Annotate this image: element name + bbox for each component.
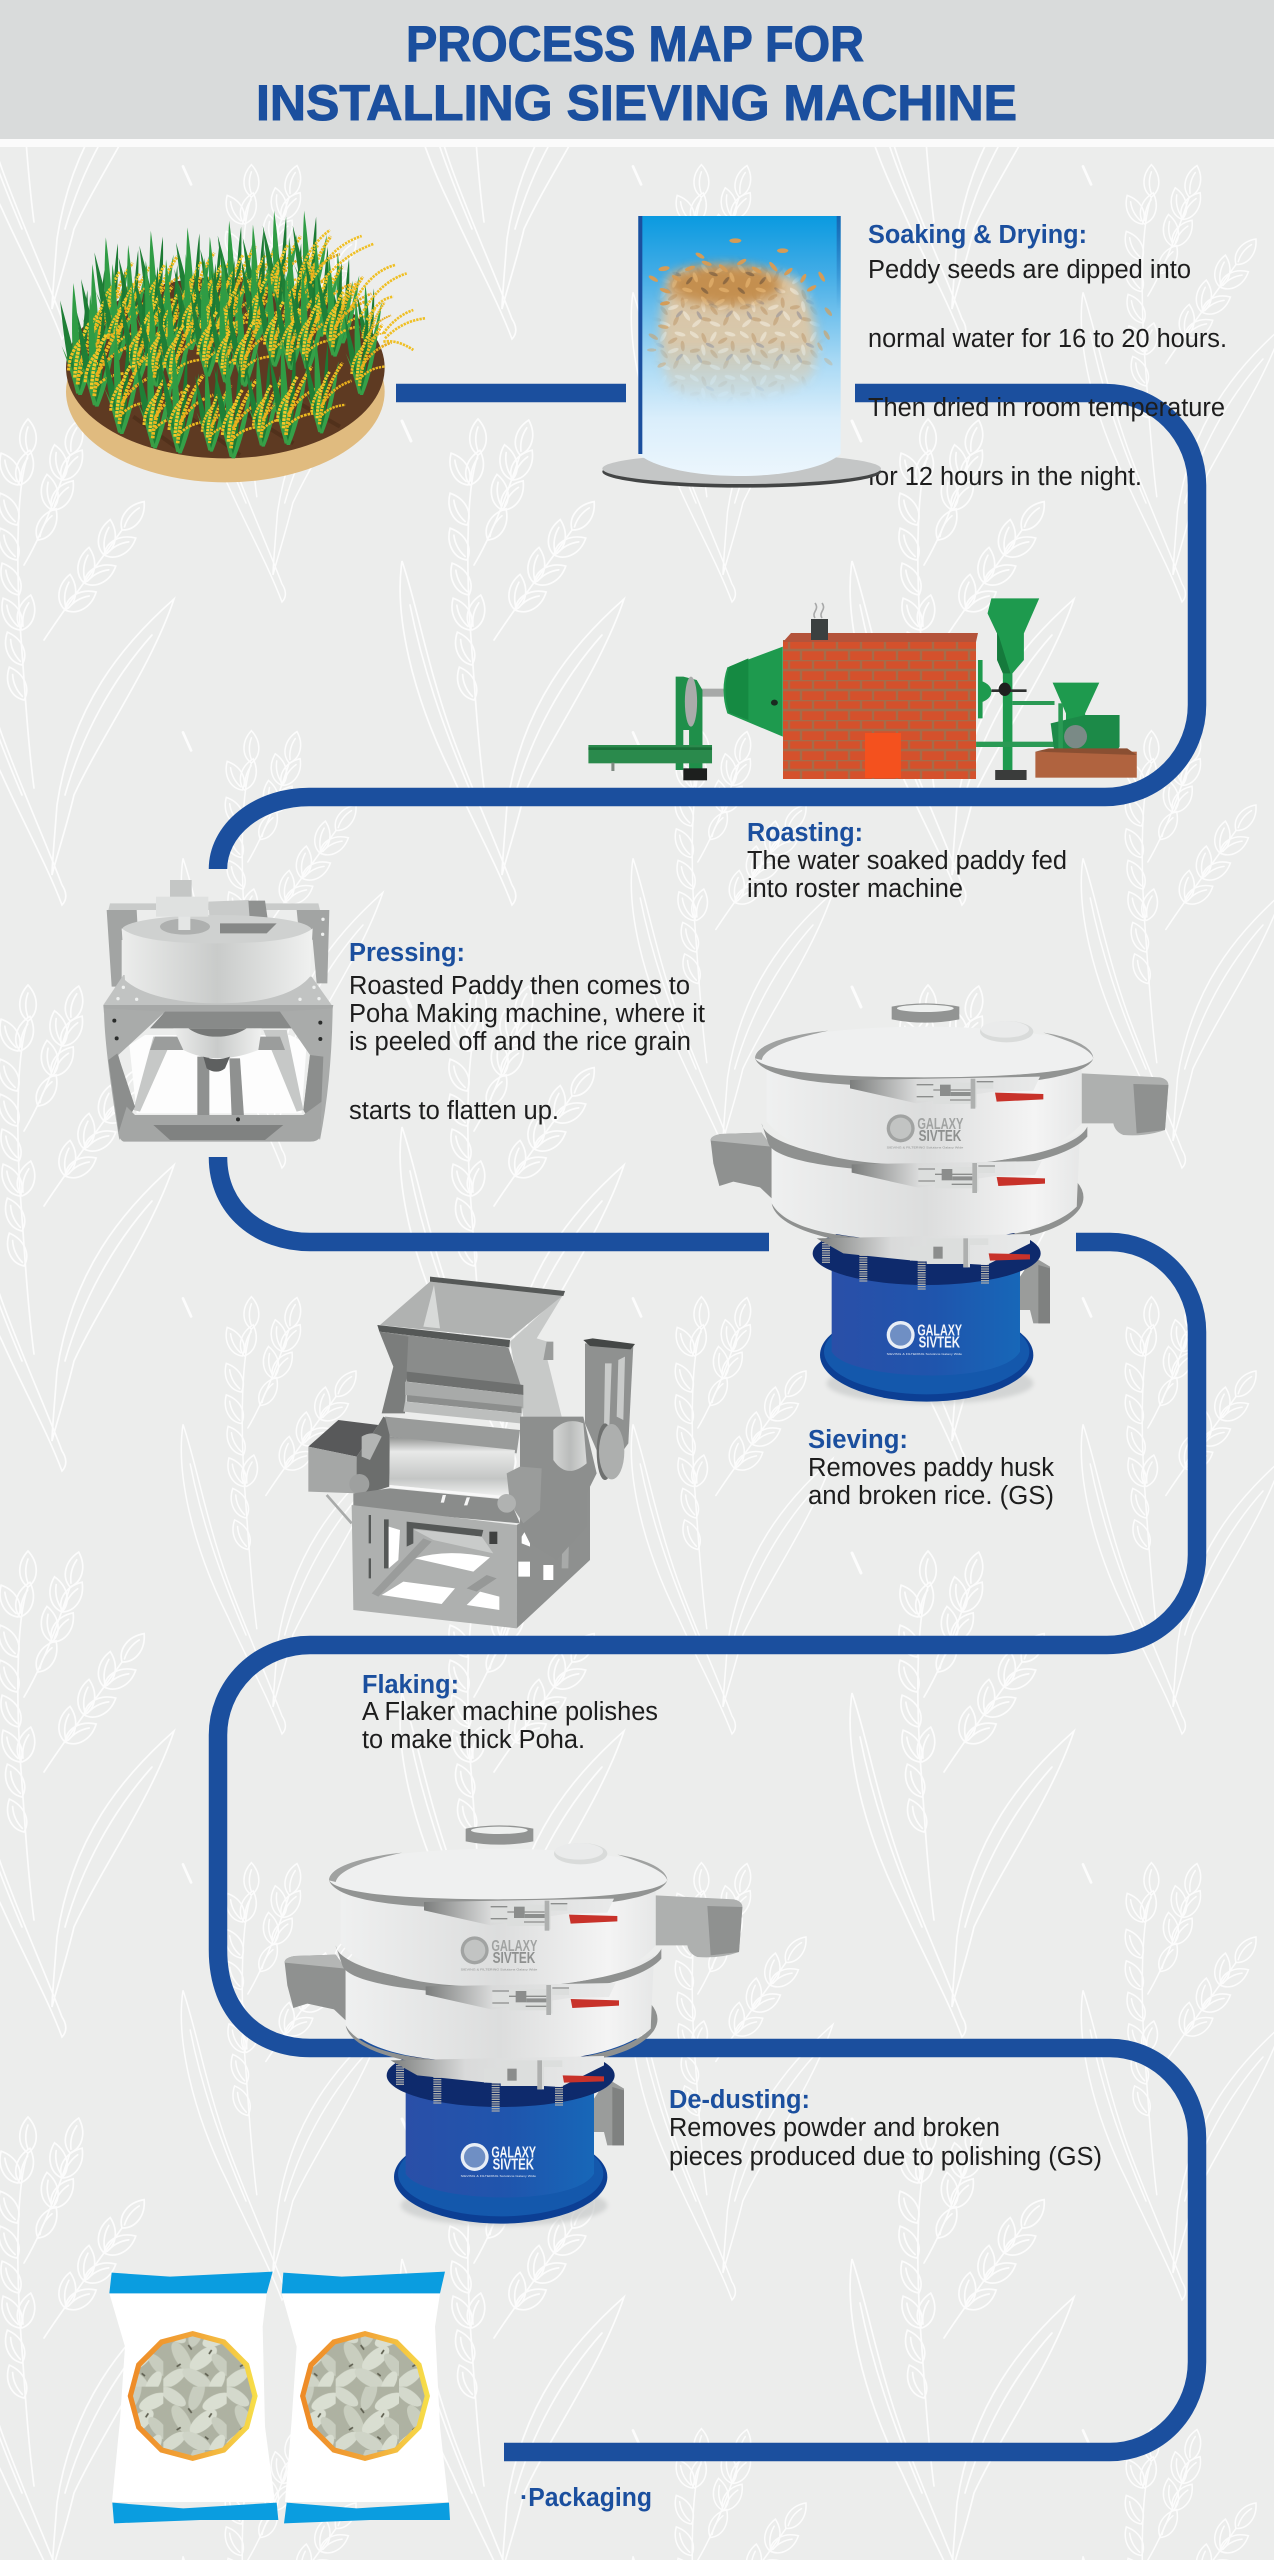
text: sieving: Removes paddy husk: [808, 1454, 1054, 1482]
text: flaking: A Flaker machine polishes: [362, 1698, 658, 1726]
icon: de-dusting sieving machine: [285, 1825, 742, 2226]
text: roasting: into roster machine: [747, 875, 963, 903]
icon: roaster machine: [588, 598, 1137, 780]
text: soaking and drying: normal water for 16 to 20 hours.: [868, 325, 1227, 353]
logo: white base mark: GALAXY: [917, 1323, 962, 1340]
text: roasting: [747, 819, 1067, 903]
logo: white base mark 2: [461, 2143, 536, 2178]
text: de-dusting: Removes powder and broken: [669, 2114, 1000, 2142]
logo: white base mark: SIVTEK: [919, 1334, 960, 1351]
packet 2: [282, 2272, 450, 2523]
logo: grey body mark: [887, 1114, 964, 1149]
logo: grey body mark: GALAXY: [917, 1116, 963, 1133]
logo: grey body mark: SIEVING & FILTERING Solutions Galaxy Wide: [887, 1145, 964, 1149]
text: pressing: is peeled off and the rice grain: [349, 1028, 691, 1056]
title: INSTALLING SIEVING MACHINE: [256, 75, 1017, 131]
icon: rice field: [60, 211, 425, 482]
icon: pressing machine: [103, 880, 333, 1142]
flow path: [218, 393, 1197, 2452]
text: pressing: starts to flatten up.: [349, 1097, 559, 1125]
text: soaking and drying: Then dried in room temperature: [868, 394, 1225, 422]
text: pressing: Poha Making machine, where it: [349, 1000, 705, 1028]
text: sieving: Sieving:: [808, 1426, 908, 1454]
text: de-dusting: pieces produced due to polishing (GS): [669, 2143, 1102, 2171]
text: sieving: and broken rice. (GS): [808, 1482, 1054, 1510]
logo: white base mark 2: SIVTEK: [493, 2156, 534, 2173]
text: soaking and drying: [868, 221, 1227, 491]
text: pressing: Roasted Paddy then comes to: [349, 972, 690, 1000]
text: de-dusting: De-dusting:: [669, 2086, 810, 2114]
logo: white base mark: [887, 1321, 962, 1356]
text: soaking and drying: for 12 hours in the night.: [868, 463, 1142, 491]
packet 1: [109, 2272, 278, 2523]
icon: poha packets: [109, 2272, 450, 2523]
text: de-dusting: [669, 2086, 1102, 2171]
title banner: [0, 0, 1274, 147]
text: roasting: The water soaked paddy fed: [747, 847, 1067, 875]
icon: sieving machine (Galaxy Sivtek): [711, 1003, 1168, 1404]
text: roasting: Roasting:: [747, 819, 863, 847]
logo: grey body mark 2: GALAXY: [491, 1938, 537, 1955]
icon: soaking water cylinder with grains: [602, 216, 881, 488]
logo: white base mark 2: GALAXY: [491, 2145, 536, 2162]
logo: grey body mark 2: SIVTEK: [493, 1950, 535, 1967]
text: soaking and drying: Soaking & Drying:: [868, 221, 1087, 249]
title: [256, 16, 1017, 131]
title: PROCESS MAP FOR: [406, 16, 864, 72]
text: flaking: Flaking:: [362, 1671, 459, 1699]
logo: white base mark: SIEVING & FILTERING Solutions Galaxy Wide: [887, 1352, 962, 1356]
text: packaging: ·Packaging: [520, 2484, 652, 2512]
text: flaking: to make thick Poha.: [362, 1726, 585, 1754]
text: sieving: [808, 1426, 1054, 1510]
text: soaking and drying: Peddy seeds are dipped into: [868, 256, 1191, 284]
logo: grey body mark 2: [461, 1936, 538, 1971]
logo: grey body mark: SIVTEK: [919, 1128, 961, 1145]
logo: white base mark 2: SIEVING & FILTERING Solutions Galaxy Wide: [461, 2174, 536, 2178]
text: pressing: [349, 939, 705, 1125]
logo: grey body mark 2: SIEVING & FILTERING Solutions Galaxy Wide: [461, 1967, 538, 1971]
icon: flaker machine: [308, 1277, 635, 1628]
text: flaking: [362, 1671, 658, 1754]
text: pressing: Pressing:: [349, 939, 465, 967]
